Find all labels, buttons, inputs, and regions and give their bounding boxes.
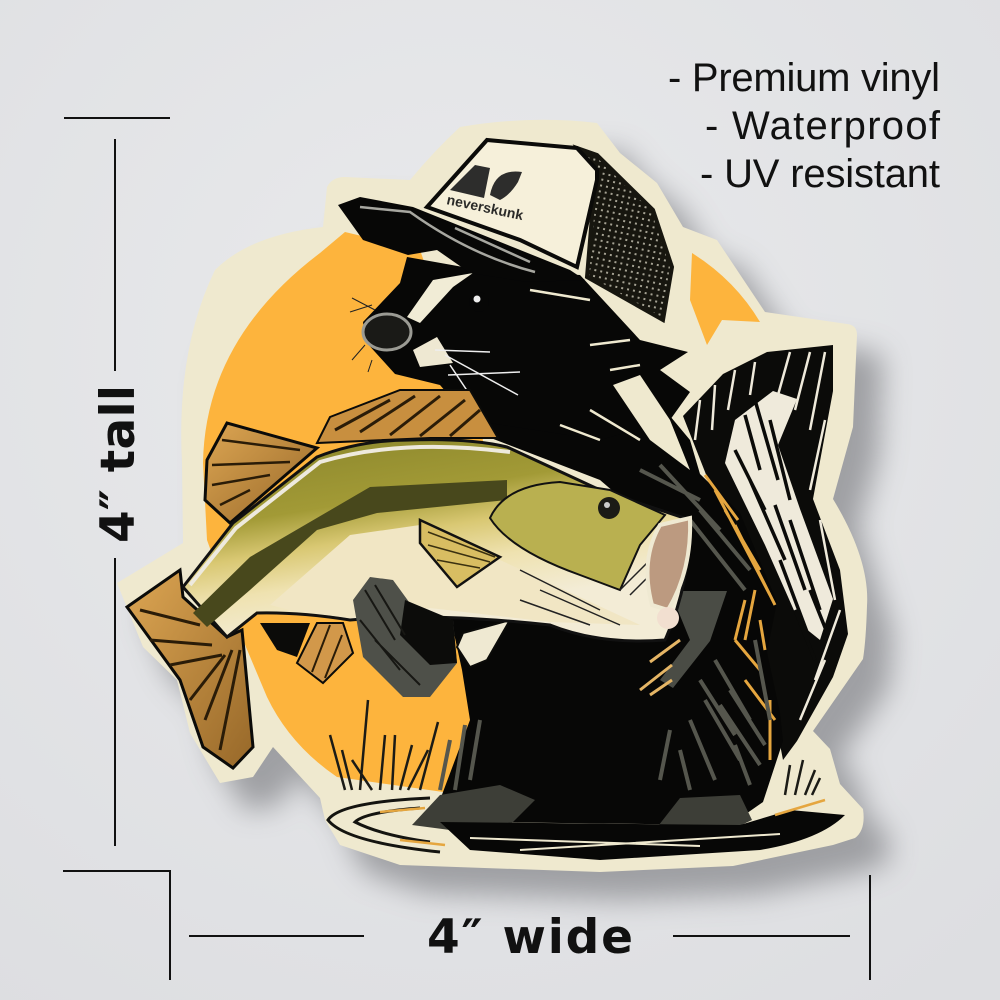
neck white fur <box>613 375 690 470</box>
fish mouth <box>648 518 690 610</box>
cap mesh <box>577 148 672 320</box>
fish eye <box>598 497 620 519</box>
skunk paw holding fish <box>353 577 457 697</box>
skunk body <box>412 340 783 835</box>
rear dorsal fin <box>205 423 317 523</box>
skunk feet <box>412 785 535 830</box>
fish lip ball <box>657 607 679 629</box>
head stripe <box>407 273 473 323</box>
feature list <box>668 56 941 196</box>
skunk claws <box>640 640 680 695</box>
front dorsal fin <box>317 390 498 443</box>
shadow under fish <box>260 623 310 657</box>
orange fur <box>705 475 775 760</box>
nose <box>363 314 411 350</box>
cheek lines <box>520 560 655 625</box>
pectoral fin <box>420 520 500 587</box>
white back edge <box>190 447 510 585</box>
width label: 4″ wide <box>427 910 633 965</box>
water pond <box>328 798 845 860</box>
eye <box>469 292 489 312</box>
cap logo <box>445 165 525 223</box>
sun fragment <box>690 253 760 345</box>
sticker shadow <box>143 151 893 900</box>
cap logo: neverskunk <box>445 191 525 223</box>
sticker <box>117 120 867 872</box>
orange sun <box>203 232 520 800</box>
height label: 4″ tall <box>91 385 146 543</box>
width dimension <box>63 871 871 980</box>
grey fur <box>440 465 770 790</box>
whiskers <box>435 350 520 395</box>
gill cover <box>490 482 665 590</box>
tail fin <box>127 570 253 768</box>
grass <box>330 700 438 790</box>
die-cut border <box>117 120 867 872</box>
skunk arm <box>660 591 727 688</box>
skunk head <box>350 257 690 470</box>
largemouth bass <box>183 440 690 641</box>
feature list: - Waterproof <box>705 104 941 148</box>
muzzle <box>413 337 453 367</box>
cap front <box>427 140 597 267</box>
right grass <box>785 760 820 795</box>
fish fins <box>127 390 510 768</box>
lateral stripe <box>193 480 507 627</box>
feature list: - UV resistant <box>700 152 940 196</box>
trucker cap <box>338 140 672 320</box>
white fin <box>457 620 510 667</box>
cap brim <box>338 197 585 282</box>
feature list: - Premium vinyl <box>668 56 940 100</box>
skunk tail <box>683 345 848 760</box>
fish belly <box>270 525 640 625</box>
pelvic fin <box>297 623 353 683</box>
